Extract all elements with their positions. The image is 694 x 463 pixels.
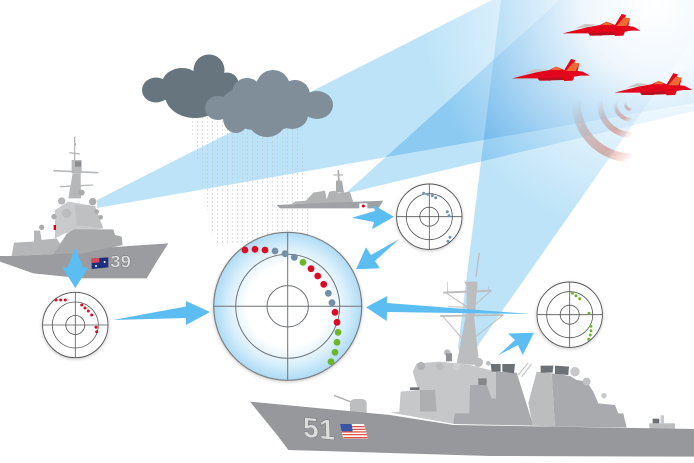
arrow: Australian ship to its radar: [62, 247, 88, 288]
red contacts: [242, 246, 340, 326]
arrow: Japanese ship to radar: [352, 205, 394, 229]
radar: Japanese ship: [397, 184, 462, 249]
storm clouds: [142, 54, 333, 137]
aft mount: [649, 415, 675, 429]
deck gun: [334, 395, 367, 413]
Australian flag: [92, 257, 108, 269]
forward deck block: [53, 229, 123, 254]
hull: [250, 402, 694, 457]
forward superstructure dark: [453, 372, 533, 426]
radar reflection waves: [576, 100, 632, 158]
hull number: 51: [302, 412, 335, 446]
red jets: [512, 14, 692, 95]
radar: US ship: [537, 282, 602, 347]
radar: Australian ship: [43, 292, 108, 358]
Japanese ship: [277, 170, 383, 209]
mast: [53, 137, 98, 198]
aft deck: [12, 231, 67, 256]
superstructure: [292, 191, 353, 204]
radar panels: [491, 364, 569, 375]
back cloud: [142, 54, 238, 118]
forward superstructure light: [391, 362, 496, 424]
US ship 51: [250, 253, 694, 457]
front cloud: [205, 70, 333, 137]
tower: [55, 202, 103, 238]
jet right: [614, 73, 692, 95]
hull: [277, 201, 383, 208]
arrow: US ship to radar: [498, 333, 534, 355]
Australian ship 39: [0, 137, 168, 278]
funnel vents: [518, 363, 532, 377]
arrow: US radar to combined radar: [366, 296, 530, 321]
combined radar display: [214, 232, 362, 380]
jet top: [563, 14, 641, 36]
grey contacts: [272, 248, 335, 306]
radar beams: [97, 0, 694, 367]
rain: [188, 115, 312, 246]
US flag: [340, 424, 368, 439]
arrow: Australian radar to combined radar: [113, 301, 210, 325]
aft superstructure: [552, 373, 627, 427]
mast: [440, 253, 503, 365]
Japanese flag: [359, 203, 367, 209]
hull number: 39: [110, 251, 131, 271]
arrow: Japanese radar to combined radar: [356, 239, 399, 269]
green contacts: [300, 259, 341, 365]
mast: [333, 170, 344, 193]
hull: [0, 243, 168, 278]
jet left: [512, 59, 590, 81]
